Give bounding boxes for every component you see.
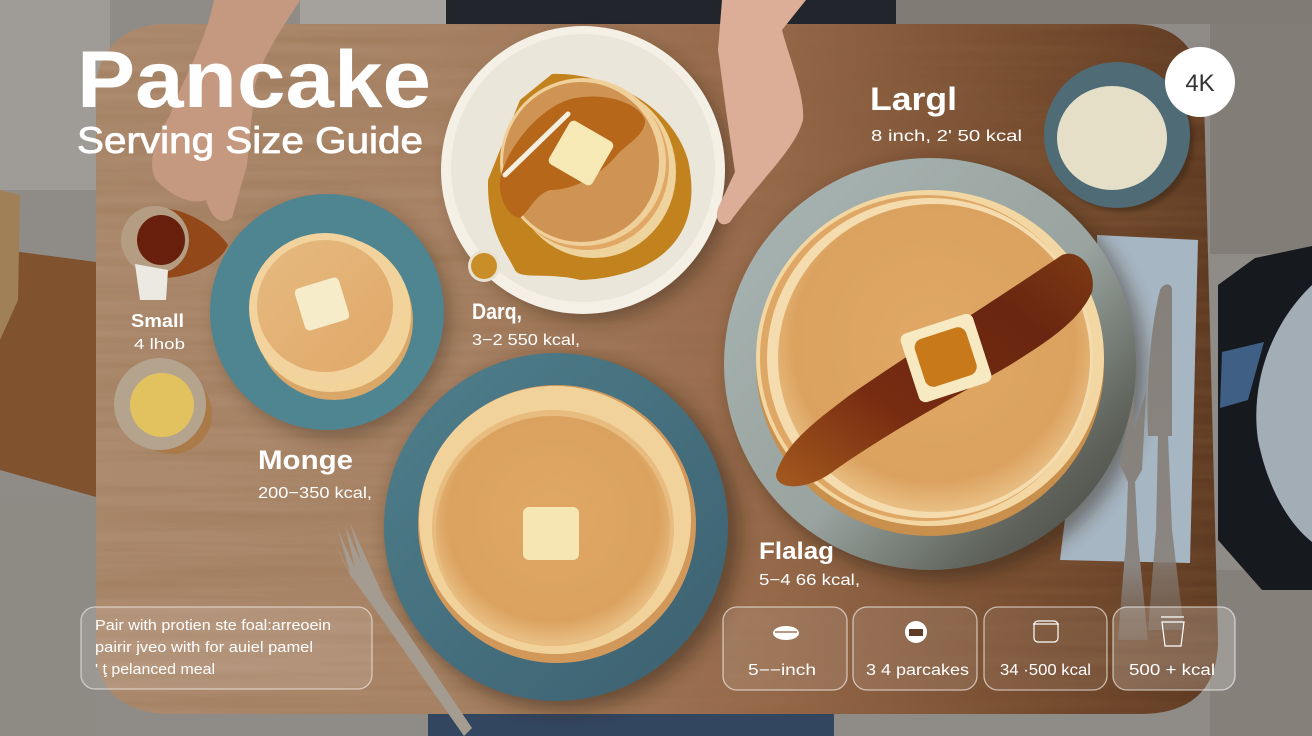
stat card: inch <box>723 607 847 690</box>
stat card: pancakes: 3 4 parcakes <box>866 662 969 679</box>
syrup on top <box>500 97 645 218</box>
label: flalag: Flalag <box>759 538 834 565</box>
honey glass <box>114 358 212 454</box>
large plate with pancakes <box>724 158 1146 580</box>
butter <box>523 507 579 560</box>
title: Pancake <box>77 35 431 125</box>
person top and bottom clothing <box>428 0 896 736</box>
butter <box>294 276 350 332</box>
label: large <box>870 81 1022 145</box>
stat card: inch: 5−−inch <box>748 662 816 679</box>
person right side <box>1218 246 1312 590</box>
medium bottom plate with pancakes <box>384 353 740 710</box>
butter pat <box>899 312 993 404</box>
stat card: kcal range <box>984 607 1107 690</box>
stat card: pancakes <box>853 607 977 690</box>
top white plate with syrup pancakes <box>441 26 732 320</box>
fork bottom <box>331 523 472 736</box>
label: monge: Monge <box>258 445 353 475</box>
label: flalag: 5−4 66 kcal, <box>759 572 860 589</box>
label: small: Small <box>131 311 184 331</box>
stat card: kcal plus <box>1113 607 1235 690</box>
icon: cup <box>1161 617 1184 646</box>
label: monge: 200−350 kcal, <box>258 485 372 502</box>
small plate with pancakes <box>210 194 450 438</box>
title <box>77 35 431 161</box>
stat card: kcal range: 34 ·500 kcal <box>1000 662 1091 679</box>
right hand <box>717 0 806 224</box>
icon: plate pin <box>905 621 927 643</box>
label: darq: 3−2 550 kcal, <box>472 332 580 349</box>
subtitle: Serving Size Guide <box>77 120 423 161</box>
label: large: 8 inch, 2' 50 kcal <box>871 128 1022 145</box>
cutlery knife and fork <box>1118 284 1184 640</box>
syrup stripe <box>776 254 1093 486</box>
tip box: pairir jveo with for auiel pamel <box>95 640 313 656</box>
icon: pancake stack <box>773 626 799 640</box>
syrup dish <box>468 250 500 282</box>
left hand <box>152 0 300 221</box>
label: small: 4 lhob <box>134 336 185 353</box>
4K badge: 4K <box>1185 70 1215 97</box>
tip box: Pair with protien ste foal:arreoein <box>95 618 331 634</box>
label: monge <box>258 445 372 502</box>
label: large: Largl <box>870 81 957 117</box>
icon: jar <box>1033 621 1059 642</box>
napkin <box>1060 235 1198 563</box>
label: flalag <box>759 538 860 589</box>
butter <box>547 119 615 187</box>
label: darq: Darq, <box>472 299 522 324</box>
syrup glass <box>121 206 228 300</box>
label: small <box>131 311 185 353</box>
tip box <box>81 607 372 689</box>
tip box: ' ţ pelanced meal <box>95 662 215 678</box>
milk bowl <box>1044 62 1194 212</box>
stat card: kcal plus: 500 + kcal <box>1129 662 1215 679</box>
label: darq <box>472 299 580 349</box>
wooden chair <box>0 190 96 497</box>
4K badge <box>1165 47 1235 117</box>
